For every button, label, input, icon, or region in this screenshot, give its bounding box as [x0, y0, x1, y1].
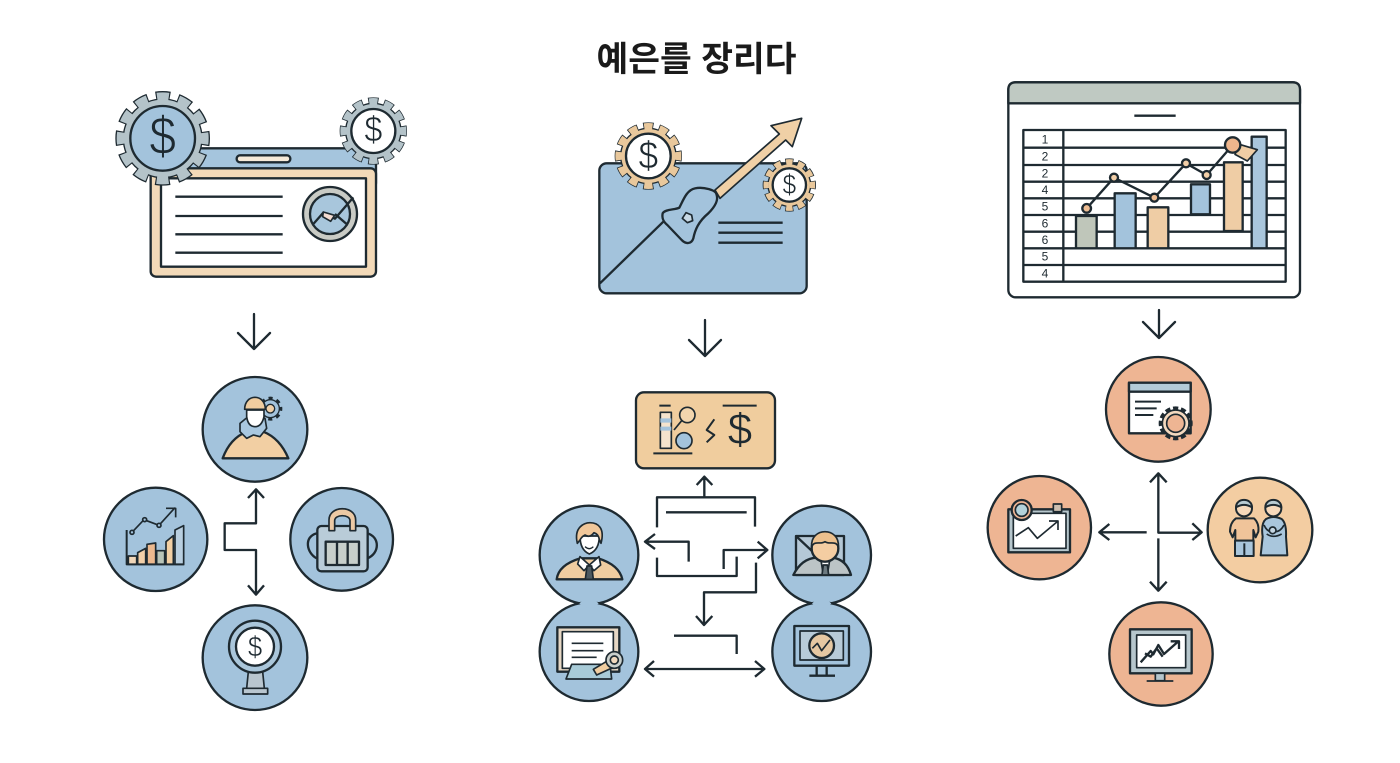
icon: small dollar gear — [343, 101, 404, 161]
line chart with markers — [1082, 137, 1257, 213]
diagram: four orange circles with cross arrows — [988, 357, 1312, 706]
panel: middle column — [540, 118, 871, 701]
neck joins between circles — [579, 599, 831, 608]
icon: small dollar gear: $ — [364, 110, 382, 150]
bar chart — [1076, 137, 1267, 248]
illustration: spreadsheet window with chart — [1008, 82, 1300, 297]
arrow: card to circles — [238, 314, 270, 349]
row numbers: 6 — [1042, 233, 1049, 247]
arrows: four way cross — [1099, 473, 1202, 591]
icon: businessman — [540, 506, 638, 604]
icon: two people — [1208, 478, 1312, 582]
row numbers: 5 — [1042, 200, 1049, 214]
icon: monitor with trend — [1109, 602, 1213, 706]
icon: left dollar gear: $ — [638, 133, 658, 177]
diagram: four blue circles with connector — [104, 377, 393, 710]
icon: chart board with lens — [988, 476, 1091, 579]
icon box: chart and dollar — [636, 392, 775, 468]
illustration: card with dollar gears — [120, 96, 404, 277]
row numbers: 2 — [1042, 166, 1049, 180]
icon: dollar magnifier: $ — [248, 630, 262, 663]
icon: certificate with seal — [540, 602, 638, 701]
illustration: envelope card with rocket arrow and gears — [599, 118, 813, 293]
panel: right column — [988, 82, 1312, 706]
row numbers: 6 — [1042, 216, 1049, 230]
title: 예은를 장리다 — [596, 41, 797, 79]
icon: large dollar gear — [120, 96, 205, 181]
icon: dollar magnifier — [203, 605, 307, 710]
icon: man over envelope — [772, 506, 871, 604]
row numbers: 5 — [1042, 250, 1049, 264]
icon: large dollar gear: $ — [149, 106, 176, 166]
row numbers: 1 — [1042, 133, 1049, 147]
row numbers: 4 — [1042, 183, 1049, 197]
icon: padlock bag — [290, 488, 393, 591]
arrows: branching flow connectors — [645, 477, 767, 677]
diagram: money box with four linked circles — [540, 392, 871, 701]
icon: left dollar gear — [618, 126, 679, 186]
row numbers: 2 — [1042, 150, 1049, 164]
arrow: sheet to circles — [1143, 310, 1175, 338]
panel: left column — [104, 96, 404, 710]
icon box: chart and dollar: $ — [728, 405, 752, 454]
arrow: card to flow — [689, 320, 721, 356]
icon: window with gear — [1106, 357, 1211, 462]
icon: right dollar gear: $ — [782, 169, 797, 200]
icon: right dollar gear — [766, 161, 813, 209]
arrow: stepped connector up and down — [225, 489, 264, 595]
icon: worker with gear — [203, 377, 307, 482]
row numbers: 4 — [1042, 266, 1049, 280]
icon: growth bar chart — [104, 488, 207, 591]
icon: monitor with globe chart — [772, 602, 871, 701]
row numbers — [1042, 133, 1049, 280]
